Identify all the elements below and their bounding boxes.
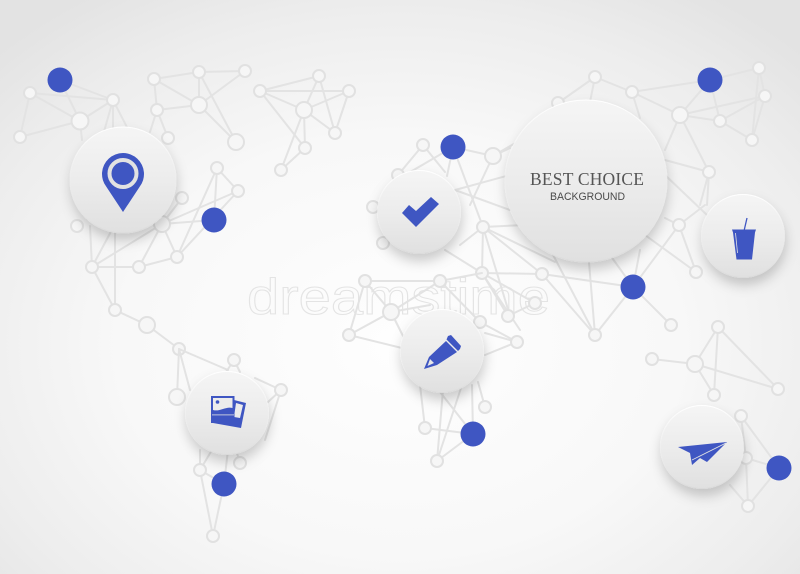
icon: pencil bbox=[424, 335, 461, 369]
badge: photos bbox=[186, 372, 268, 454]
badge: location pin bbox=[70, 127, 176, 233]
network: Greenland bbox=[254, 70, 355, 176]
network: North America bbox=[71, 162, 244, 355]
network: Australia bbox=[646, 321, 784, 401]
icon: map pin bbox=[102, 153, 144, 212]
title: BEST CHOICE bbox=[530, 169, 644, 189]
badge: drink cup bbox=[702, 194, 784, 278]
icon: photos bbox=[211, 396, 246, 428]
network: Canada bbox=[148, 65, 251, 150]
icon: paper plane bbox=[678, 442, 727, 465]
blue dots bbox=[48, 68, 792, 496]
network: Eurasia bbox=[367, 62, 771, 341]
icon: drink cup bbox=[732, 218, 756, 260]
watermark: dreamstime bbox=[247, 269, 550, 325]
icon: check mark bbox=[402, 197, 439, 227]
network: Alaska bbox=[14, 80, 131, 143]
subtitle: BACKGROUND bbox=[550, 191, 625, 203]
badge: check mark bbox=[378, 170, 460, 254]
network: Africa bbox=[343, 273, 541, 467]
badge: paper plane bbox=[660, 406, 744, 488]
badge: main title bbox=[505, 100, 667, 262]
network: South America bbox=[169, 349, 287, 542]
badge: pencil bbox=[400, 310, 484, 392]
network: New Zealand bbox=[730, 410, 779, 512]
